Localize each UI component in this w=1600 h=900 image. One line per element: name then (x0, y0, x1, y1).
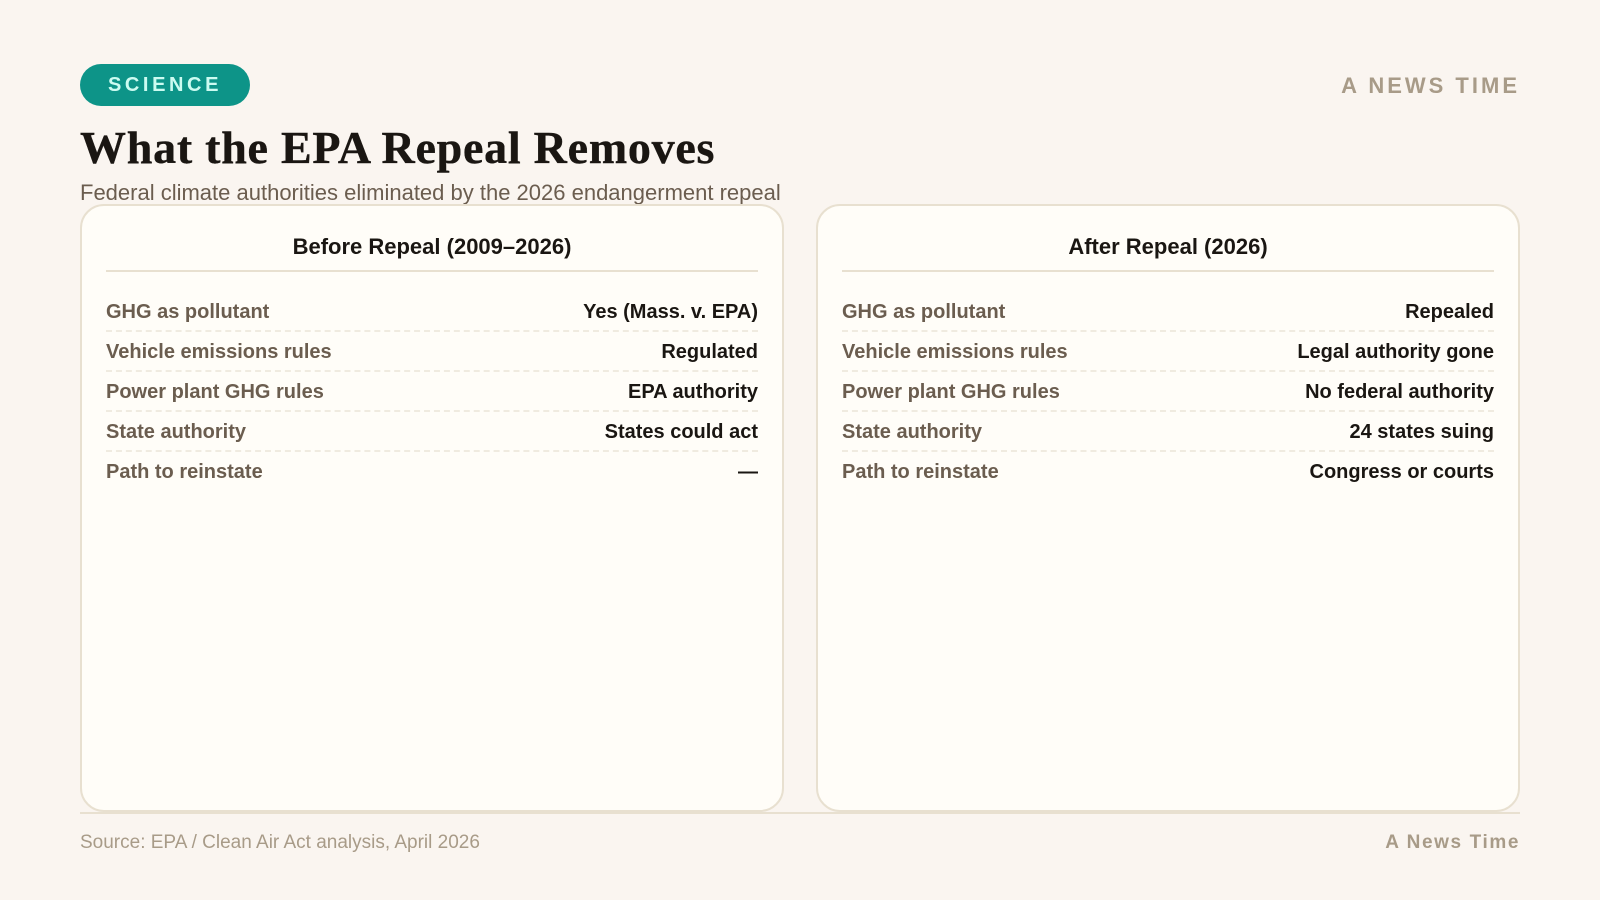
row: vehicle emissions rules (106, 332, 758, 372)
category pill (80, 64, 250, 106)
row: path to reinstate (842, 461, 1494, 483)
row: state authority (106, 412, 758, 452)
row: power plant GHG rules: Power plant GHG rules (106, 381, 324, 403)
source note: Source: EPA / Clean Air Act analysis, April 2026 (80, 832, 480, 853)
row: GHG as pollutant: GHG as pollutant (106, 301, 269, 323)
row: state authority: State authority (106, 421, 246, 443)
row: vehicle emissions rules: Regulated (661, 341, 758, 363)
row: state authority: 24 states suing (1349, 421, 1494, 443)
row: state authority (842, 412, 1494, 452)
row: GHG as pollutant (106, 292, 758, 332)
row: power plant GHG rules: Power plant GHG rules (842, 381, 1060, 403)
row: GHG as pollutant (842, 292, 1494, 332)
row: GHG as pollutant: GHG as pollutant (842, 301, 1005, 323)
row: vehicle emissions rules: Vehicle emissions rules (106, 341, 332, 363)
brand mark: A NEWS TIME (1341, 73, 1520, 98)
category pill: SCIENCE (108, 74, 222, 96)
row: path to reinstate: Path to reinstate (106, 461, 263, 483)
row: power plant GHG rules (106, 372, 758, 412)
row: path to reinstate: Congress or courts (1310, 461, 1494, 483)
row: path to reinstate: — (738, 461, 758, 483)
panel: after repeal (816, 204, 1520, 812)
row: vehicle emissions rules: Legal authority gone (1297, 341, 1494, 363)
subtitle: Federal climate authorities eliminated by the 2026 endangerment repeal (80, 180, 781, 205)
row: power plant GHG rules: No federal authority (1305, 381, 1494, 403)
row: power plant GHG rules (842, 372, 1494, 412)
row: state authority: State authority (842, 421, 982, 443)
row: path to reinstate (106, 461, 758, 483)
panel: before repeal (80, 204, 784, 812)
row: GHG as pollutant: Repealed (1405, 301, 1494, 323)
row: state authority: States could act (605, 421, 758, 443)
row: vehicle emissions rules: Vehicle emissions rules (842, 341, 1068, 363)
row: path to reinstate: Path to reinstate (842, 461, 999, 483)
panel heading: after (842, 230, 1494, 272)
panel heading: before (106, 230, 758, 272)
panel heading: after: After Repeal (2026) (1068, 234, 1268, 259)
panel heading: before: Before Repeal (2009–2026) (293, 234, 571, 259)
row: power plant GHG rules: EPA authority (628, 381, 758, 403)
row: vehicle emissions rules (842, 332, 1494, 372)
footer brand: A News Time (1385, 832, 1520, 853)
row: GHG as pollutant: Yes (Mass. v. EPA) (583, 301, 758, 323)
title: What the EPA Repeal Removes (80, 122, 715, 173)
